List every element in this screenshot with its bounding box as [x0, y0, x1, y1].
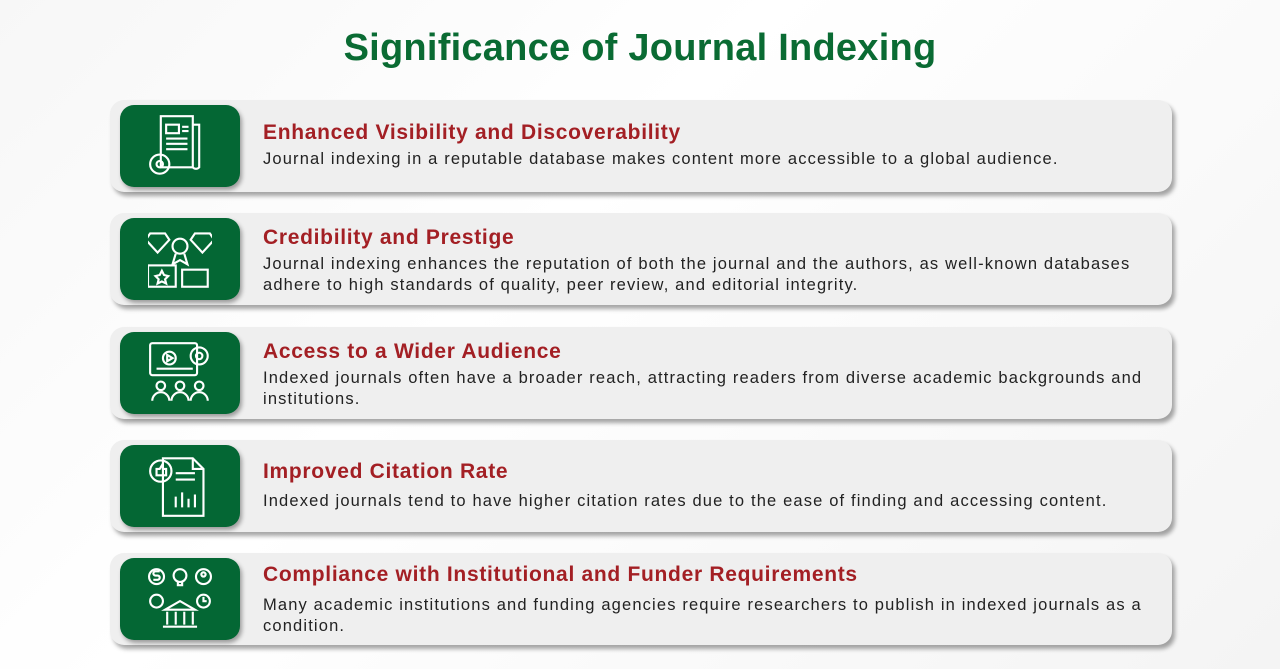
panel: citation — [110, 440, 1172, 532]
heading: Access to a Wider Audience — [263, 340, 562, 363]
text: Journal indexing enhances the reputation of both the journal and the authors, as well-known databases adhere to high standards of quality, peer review, and editorial integrity. — [263, 255, 1130, 294]
icon: newspaper with eye — [120, 105, 240, 187]
icon: document with thumb and chart — [120, 445, 240, 527]
icon: institution with symbols — [120, 558, 240, 640]
icon: screen with audience — [120, 332, 240, 414]
text: Indexed journals tend to have higher citation rates due to the ease of finding and accessing content. — [263, 492, 1107, 510]
text: Indexed journals often have a broader reach, attracting readers from diverse academic backgrounds and institutions. — [263, 369, 1142, 408]
heading: Compliance with Institutional and Funder Requirements — [263, 563, 858, 586]
heading: Credibility and Prestige — [263, 226, 514, 249]
title: Significance of Journal Indexing — [344, 27, 936, 69]
heading: Enhanced Visibility and Discoverability — [263, 121, 681, 144]
panel: compliance — [110, 553, 1172, 645]
text: Many academic institutions and funding agencies require researchers to publish in indexed journals as a condition. — [263, 596, 1142, 635]
heading: Improved Citation Rate — [263, 460, 508, 483]
text: Journal indexing in a reputable database makes content more accessible to a global audience. — [263, 150, 1059, 168]
panel: audience — [110, 327, 1172, 419]
icon: diamonds and award — [120, 218, 240, 300]
panel: visibility — [110, 100, 1172, 192]
panel: credibility — [110, 213, 1172, 305]
